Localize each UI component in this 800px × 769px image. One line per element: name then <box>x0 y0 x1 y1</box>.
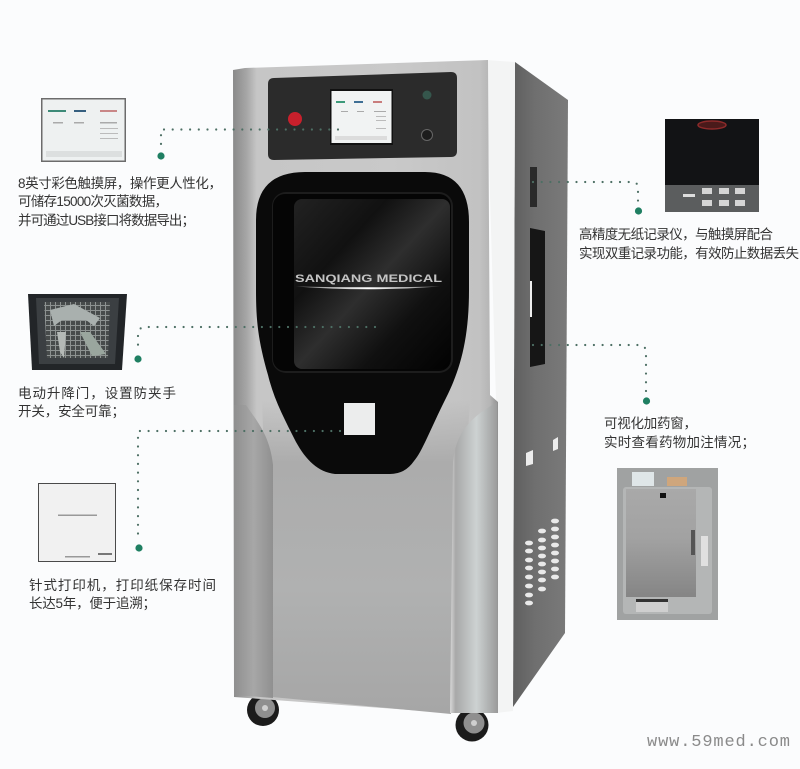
thumbnail: printer <box>38 483 116 562</box>
leader: dosing window <box>533 345 650 405</box>
text: printer: 针式打印机，打印纸保存时间 <box>29 577 216 593</box>
text: dosing window: 可视化加药窗， <box>604 415 697 431</box>
power switch <box>422 130 432 140</box>
white door button <box>344 403 375 435</box>
thumbnail: dosing window <box>617 468 718 620</box>
text: lift door: 开关，安全可靠； <box>18 403 125 420</box>
leader: printer <box>135 431 340 552</box>
thumbnail: touch screen <box>41 98 126 162</box>
text: lift door <box>18 386 176 420</box>
text: printer <box>29 577 216 612</box>
text: dosing window <box>604 415 755 451</box>
brand logo: SANQIANG MEDICAL <box>295 273 442 285</box>
text: touch screen <box>18 175 222 229</box>
text: paperless recorder: 高精度无纸记录仪，与触摸屏配合 <box>579 226 774 242</box>
side sockets <box>526 437 558 466</box>
control panel <box>268 72 457 160</box>
white edge strip <box>486 60 515 713</box>
front silver body <box>233 60 498 713</box>
text: lift door: 电动升降门，设置防夹手 <box>18 386 176 401</box>
text: printer: 长达5年，便于追溯； <box>29 596 156 612</box>
text: touch screen: 8英寸彩色触摸屏，操作更人性化， <box>18 175 222 191</box>
ventilation holes <box>525 519 559 605</box>
thumbnail: paperless recorder <box>665 119 759 212</box>
watermark: www.59med.com <box>647 733 790 752</box>
right pillar <box>450 402 498 713</box>
wheels <box>247 694 488 742</box>
left pillar <box>234 405 273 698</box>
door frame <box>256 172 469 474</box>
lower steel panel <box>262 400 470 714</box>
text: touch screen: 并可通过USB接口将数据导出； <box>18 212 195 229</box>
text: touch screen: 可储存15000次灭菌数据， <box>18 194 168 209</box>
side recorder slot <box>530 167 537 207</box>
green indicator <box>422 90 432 100</box>
leader: touch screen <box>157 130 338 160</box>
emergency stop button <box>288 112 302 126</box>
logo swoosh <box>296 286 440 289</box>
text: paperless recorder <box>579 226 800 261</box>
text: dosing window: 实时查看药物加注情况； <box>604 435 755 451</box>
touch screen <box>330 89 393 145</box>
leader: recorder <box>533 182 642 215</box>
cabinet side panel <box>513 62 568 707</box>
leader: lift door <box>134 327 375 363</box>
thumbnail: lift door chamber <box>28 294 127 370</box>
text: paperless recorder: 实现双重记录功能，有效防止数据丢失 <box>579 246 800 261</box>
door window <box>272 192 453 373</box>
side dosing window <box>530 228 545 367</box>
sterilizer cabinet <box>233 60 568 742</box>
